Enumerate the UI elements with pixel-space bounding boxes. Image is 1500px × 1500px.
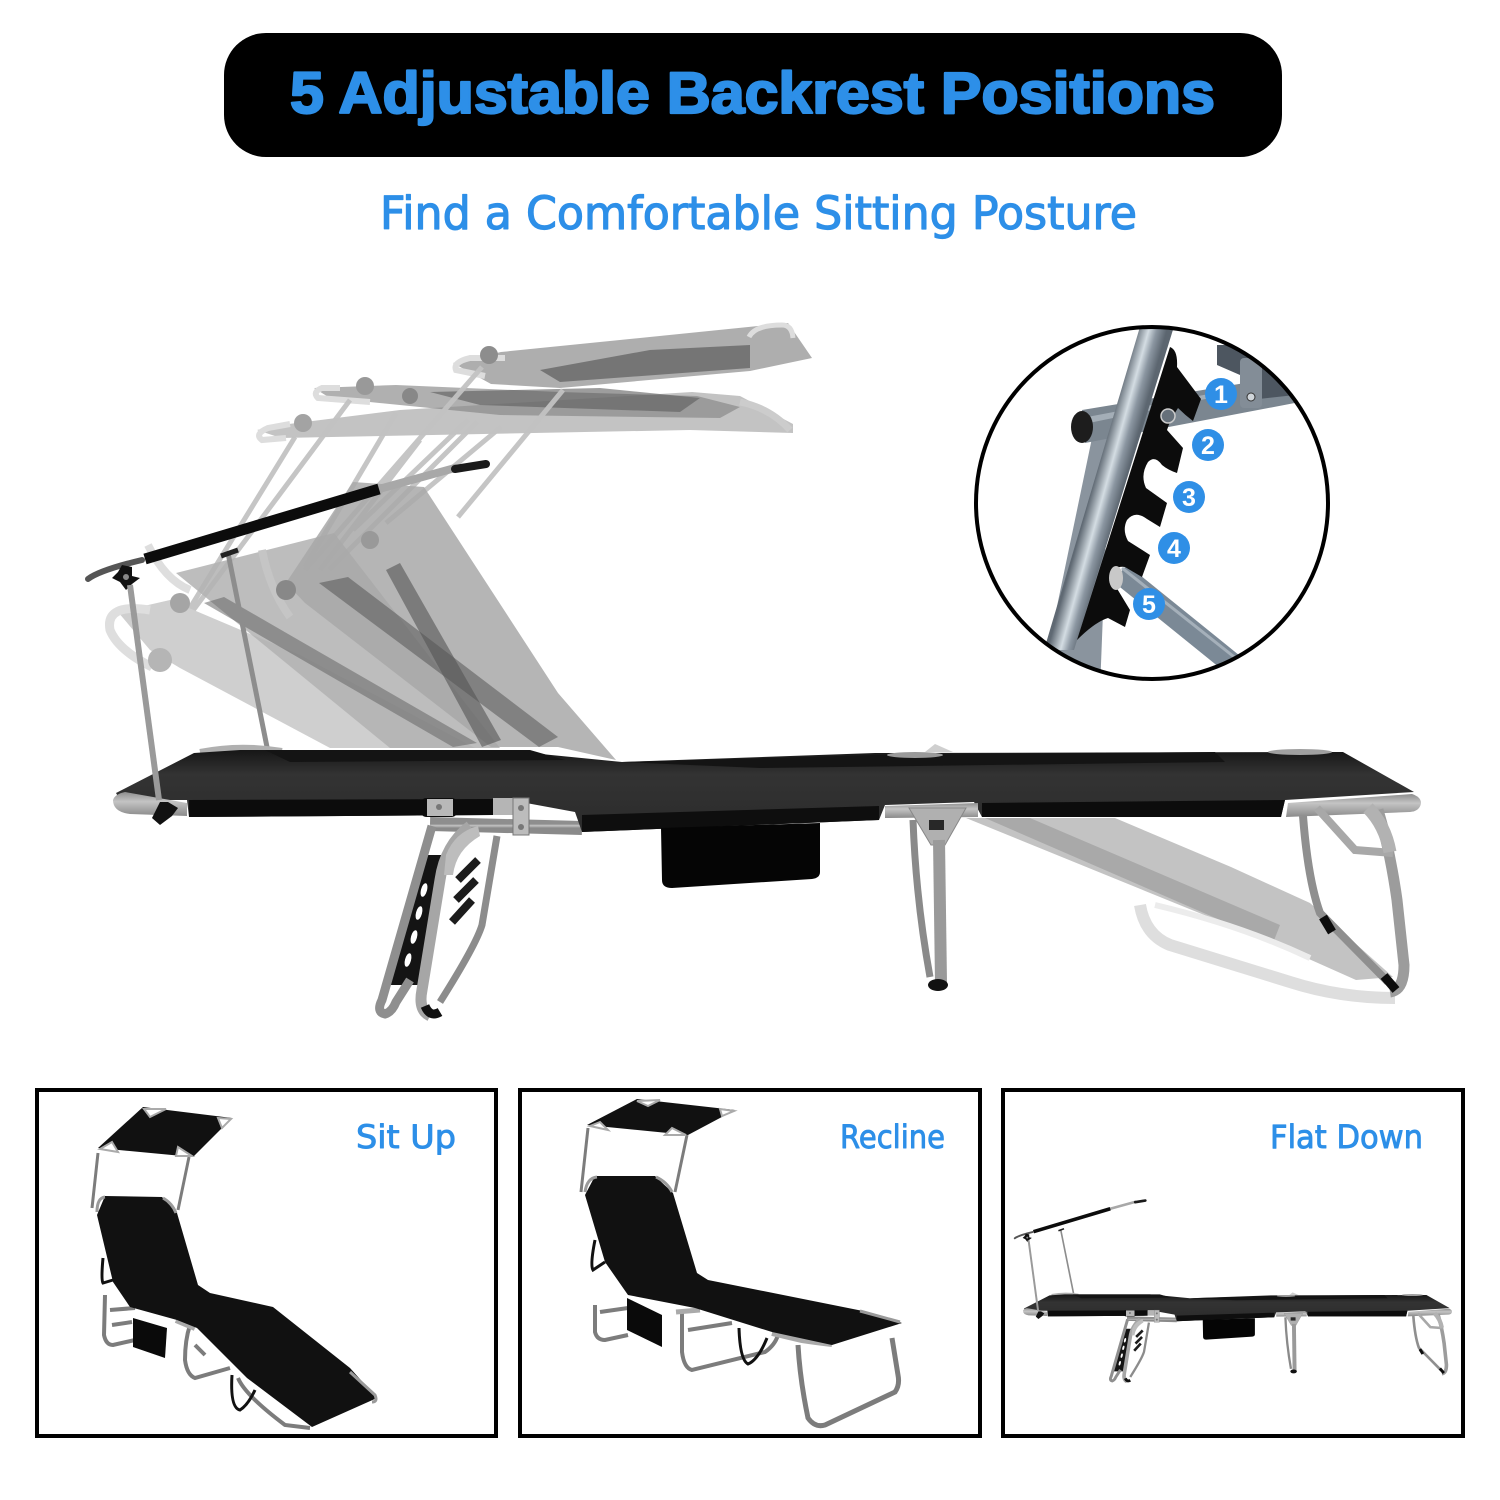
- lounger, sit up: [92, 1107, 377, 1428]
- frame hinges: [421, 798, 529, 835]
- badge 1: 1: [1214, 381, 1228, 409]
- back support tube: [1056, 438, 1107, 670]
- head legs with ratchet: [380, 826, 497, 1016]
- ghost middle backrests: [176, 482, 616, 760]
- ghost canopies: [257, 323, 812, 440]
- strut end: [1109, 566, 1123, 590]
- ratchet bolt: [1161, 409, 1175, 423]
- panel: sit up: [37, 1090, 496, 1436]
- label: sit up: Sit Up: [356, 1118, 456, 1156]
- badge 3: 3: [1182, 484, 1196, 512]
- label: flat down: Flat Down: [1270, 1118, 1423, 1156]
- main lounger, flat position: [88, 464, 1421, 1016]
- centre legs: [909, 808, 966, 991]
- badge 1: [1205, 378, 1237, 410]
- ghost poles: [166, 367, 563, 647]
- badge 2: [1192, 429, 1224, 461]
- main tube: [1044, 320, 1176, 650]
- top-right bracket: [1217, 345, 1289, 402]
- panel: flat down: [1003, 1090, 1463, 1436]
- lounger, recline: [581, 1099, 902, 1426]
- lower strut tube: [1120, 573, 1240, 670]
- title text: 5 Adjustable Backrest Positions: [290, 61, 1215, 126]
- canopy clamp: [152, 802, 178, 825]
- middle silver rail: [430, 824, 582, 828]
- badge 5: [1133, 588, 1165, 620]
- label: recline: Recline: [840, 1118, 945, 1156]
- bed fabric: [116, 750, 1414, 832]
- cross tube: [1082, 383, 1300, 443]
- subtitle: Find a Comfortable Sitting Posture: [380, 187, 1137, 240]
- ghost lowest backrest: [110, 545, 475, 748]
- black ratchet plate: [1077, 347, 1201, 640]
- badge 4: 4: [1167, 535, 1181, 563]
- badge 5: 5: [1142, 591, 1156, 619]
- lounger, flat down: [1015, 1201, 1452, 1382]
- ghost backrest positions: [110, 323, 812, 760]
- ghost lowered footrest: [966, 818, 1395, 998]
- rear canopy pole: [200, 550, 282, 752]
- ratchet detail circle: [976, 320, 1328, 690]
- badge 3: [1173, 481, 1205, 513]
- top edge plates: [887, 744, 1332, 758]
- cross tube cap: [1071, 411, 1093, 443]
- bed frame corners: [113, 792, 1421, 818]
- badge 2: 2: [1201, 432, 1215, 460]
- panel: recline: [520, 1090, 980, 1436]
- title banner: [224, 33, 1282, 157]
- front canopy pole: [130, 585, 159, 800]
- canopy rail, side on: [88, 464, 486, 590]
- foot legs: [1303, 808, 1404, 992]
- badge 4: [1158, 532, 1190, 564]
- storage pouch: [661, 823, 820, 888]
